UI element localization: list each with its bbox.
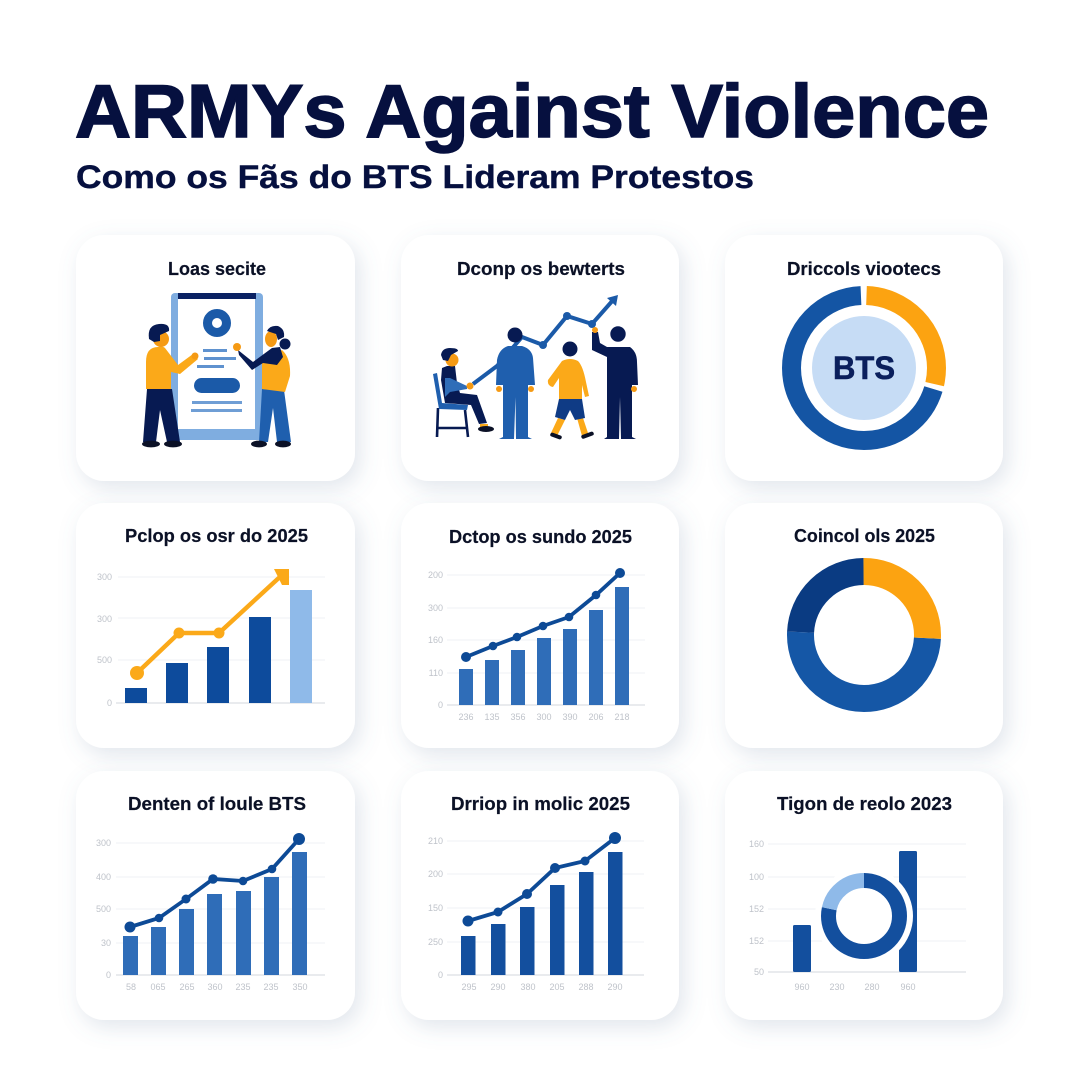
bar and line chart: 288 bbox=[578, 982, 594, 992]
bar and line chart bbox=[96, 833, 325, 992]
panel: BTS donut bbox=[725, 235, 1003, 481]
bar chart with orange trend: 300 bbox=[97, 614, 112, 624]
combined bar and donut chart: 152 bbox=[749, 936, 764, 946]
bar and line chart: 295 bbox=[461, 982, 477, 992]
icon: standing person orange bbox=[548, 342, 594, 440]
bar and line chart: 250 bbox=[428, 937, 443, 947]
bar and line chart: 210 bbox=[428, 836, 443, 846]
panel: three-part donut bbox=[725, 503, 1003, 748]
panel: bars with navy line C bbox=[401, 771, 679, 1020]
panel: group with rising line bbox=[401, 235, 679, 481]
panel: bars with navy line A bbox=[401, 503, 679, 748]
combined bar and donut chart: 230 bbox=[829, 982, 845, 992]
combined bar and donut chart bbox=[749, 839, 966, 992]
bar and line chart bbox=[428, 568, 645, 722]
bar and line chart: 206 bbox=[588, 712, 604, 722]
icon: person left bbox=[142, 324, 198, 447]
panel heading: Tigon de reolo 2023: Tigon de reolo 2023 bbox=[777, 794, 952, 814]
combined bar and donut chart: 152 bbox=[749, 904, 764, 914]
bar and line chart: 265 bbox=[179, 982, 195, 992]
bar and line chart: 300 bbox=[536, 712, 552, 722]
bar and line chart: 400 bbox=[96, 872, 111, 882]
combined bar and donut chart: 160 bbox=[749, 839, 764, 849]
bar and line chart: 0 bbox=[106, 970, 111, 980]
bar and line chart: 360 bbox=[207, 982, 223, 992]
bar and line chart: 350 bbox=[292, 982, 308, 992]
bar and line chart: 356 bbox=[510, 712, 526, 722]
bar and line chart: 218 bbox=[614, 712, 630, 722]
bar and line chart: 300 bbox=[96, 838, 111, 848]
panel: bars with overlaid donut bbox=[725, 771, 1003, 1020]
bar and line chart: 380 bbox=[520, 982, 536, 992]
combined bar and donut chart: 100 bbox=[749, 872, 764, 882]
bar chart with orange trend: 0 bbox=[107, 698, 112, 708]
donut chart with BTS centre bbox=[792, 296, 936, 440]
panel: bars with orange line bbox=[76, 503, 355, 748]
bar and line chart: 300 bbox=[428, 603, 443, 613]
bar and line chart: 200 bbox=[428, 869, 443, 879]
bar and line chart: 500 bbox=[96, 904, 111, 914]
bar and line chart: 205 bbox=[549, 982, 565, 992]
icon: standing person blue bbox=[496, 328, 535, 439]
bar and line chart: 390 bbox=[562, 712, 578, 722]
chart: rising line with arrow bbox=[473, 295, 618, 384]
bar and line chart: 58 bbox=[126, 982, 136, 992]
panel: bars with navy line B bbox=[76, 771, 355, 1020]
bar and line chart: 290 bbox=[607, 982, 623, 992]
bar chart with orange trend: 500 bbox=[97, 655, 112, 665]
bar and line chart: 30 bbox=[101, 938, 111, 948]
combined bar and donut chart: 280 bbox=[864, 982, 880, 992]
panel heading: Denten of loule BTS: Denten of loule BTS bbox=[128, 794, 306, 814]
bar and line chart: 236 bbox=[458, 712, 474, 722]
bar and line chart: 235 bbox=[263, 982, 279, 992]
icon: phone screen bbox=[171, 293, 263, 440]
bar and line chart: 290 bbox=[490, 982, 506, 992]
bar and line chart: 0 bbox=[438, 700, 443, 710]
bar chart with orange trend bbox=[97, 569, 325, 708]
icon: seated person bbox=[433, 348, 494, 437]
donut chart with BTS centre: BTS bbox=[833, 350, 895, 386]
bar chart with orange trend: 300 bbox=[97, 572, 112, 582]
combined bar and donut chart: 960 bbox=[794, 982, 810, 992]
panel heading: Coincol ols 2025: Coincol ols 2025 bbox=[794, 526, 935, 546]
panel heading: Dctop os sundo 2025: Dctop os sundo 2025 bbox=[449, 527, 632, 547]
bar and line chart: 200 bbox=[428, 570, 443, 580]
panel heading: Loas secite: Loas secite bbox=[168, 259, 266, 279]
combined bar and donut chart: 50 bbox=[754, 967, 764, 977]
donut chart bbox=[800, 572, 928, 698]
bar and line chart bbox=[428, 832, 644, 992]
bar and line chart: 150 bbox=[428, 903, 443, 913]
panel heading: Driccols viootecs: Driccols viootecs bbox=[787, 259, 941, 279]
bar and line chart: 110 bbox=[429, 668, 443, 678]
bar and line chart: 0 bbox=[438, 970, 443, 980]
panel heading: Drriop in molic 2025: Drriop in molic 2025 bbox=[451, 794, 630, 814]
bar and line chart: 160 bbox=[428, 635, 443, 645]
panel: document illustration bbox=[76, 235, 355, 481]
combined bar and donut chart: 960 bbox=[900, 982, 916, 992]
panel heading: Pclop os osr do 2025: Pclop os osr do 2025 bbox=[125, 526, 308, 546]
bar and line chart: 235 bbox=[235, 982, 251, 992]
bar and line chart: 065 bbox=[150, 982, 166, 992]
bar and line chart: 135 bbox=[484, 712, 500, 722]
panel heading: Dconp os bewterts: Dconp os bewterts bbox=[457, 259, 625, 279]
title: ARMYs Against Violence bbox=[75, 69, 989, 153]
subtitle: Como os Fãs do BTS Lideram Protestos bbox=[76, 159, 754, 195]
icon: standing person navy bbox=[592, 326, 638, 439]
icon: person right bbox=[233, 326, 291, 447]
